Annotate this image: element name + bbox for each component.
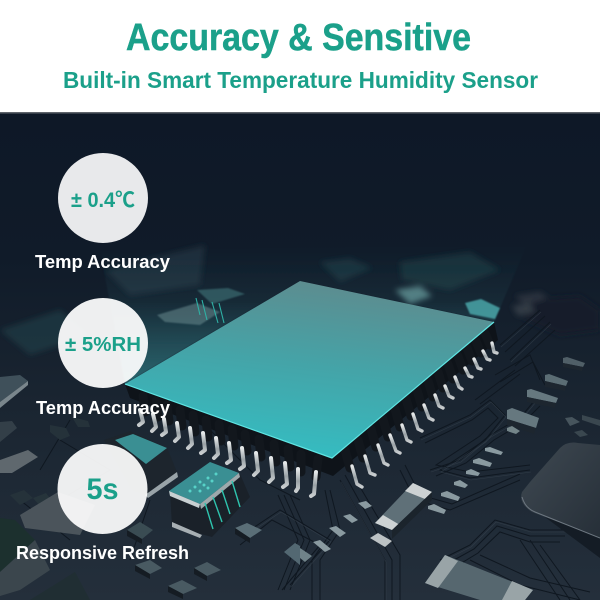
sensor chip pins bottom right edge — [352, 343, 497, 487]
label: humidity temp accuracy: Temp Accuracy — [36, 398, 170, 418]
circle: humidity accuracy — [58, 298, 148, 388]
blurred chip upper left of sensor — [157, 288, 245, 325]
circle: temperature accuracy — [58, 153, 148, 243]
small resistors right — [300, 357, 600, 562]
label: temp accuracy: Temp Accuracy — [35, 252, 170, 272]
IC behind third circle — [104, 431, 178, 498]
circle: refresh: 5s — [86, 473, 118, 506]
label: responsive refresh: Responsive Refresh — [16, 543, 189, 563]
capacitor bottom — [425, 555, 533, 600]
circle: temperature accuracy: ± 0.4℃ — [71, 189, 135, 212]
teal component at chip corner — [465, 299, 500, 319]
sensor chip pins bottom left edge — [139, 410, 316, 496]
light beam above chip — [100, 245, 527, 384]
blurred background components — [3, 246, 546, 354]
sensor chip pin bases bottom right edge — [345, 333, 490, 468]
capacitor middle — [370, 483, 432, 547]
header background — [0, 0, 600, 112]
circle: humidity accuracy: ± 5%RH — [65, 334, 141, 356]
large dark chip bottom right — [521, 443, 600, 558]
sensor chip body shadow — [125, 322, 498, 476]
sensor chip top face — [125, 281, 494, 458]
circle: refresh — [58, 444, 148, 534]
subtitle: Built-in Smart Temperature Humidity Sensor — [63, 67, 538, 93]
grey and small components left — [0, 375, 300, 600]
IC with teal stripes — [169, 462, 250, 538]
pcb traces — [20, 310, 590, 600]
title: Accuracy & Sensitive — [126, 17, 471, 59]
sensor chip bright edges — [125, 322, 494, 458]
sensor chip pin bases bottom left edge — [143, 396, 318, 477]
